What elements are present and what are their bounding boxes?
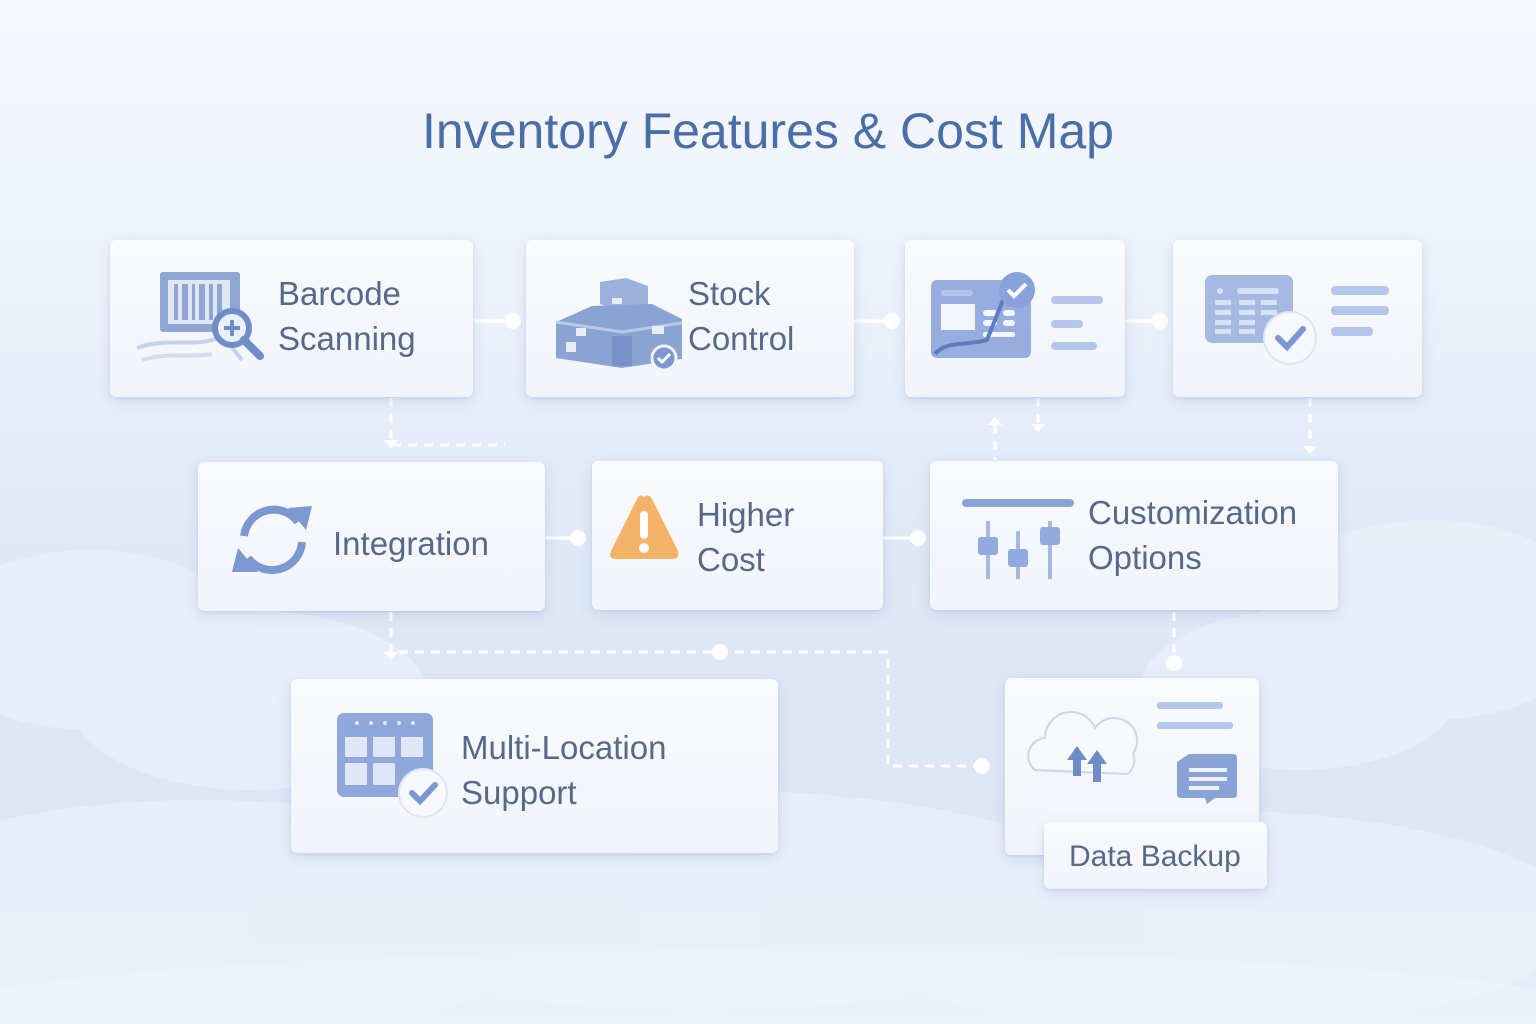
card: Higher Cost: Cost xyxy=(697,541,765,578)
card: Data Backup xyxy=(1005,678,1259,855)
card: report icon xyxy=(905,240,1125,397)
icon: table with check xyxy=(1205,275,1389,365)
label: Data Backup: Data Backup xyxy=(1069,840,1241,873)
icon: sync arrows xyxy=(232,506,312,574)
label: Data Backup xyxy=(1044,822,1267,889)
icon: calendar grid with check xyxy=(337,713,448,818)
icon: sliders xyxy=(962,499,1074,579)
icon: cloud upload and chat xyxy=(1027,702,1237,804)
card: Higher Cost xyxy=(592,461,883,610)
card: Multi-Location Support xyxy=(291,679,778,853)
card: Higher Cost: Higher xyxy=(697,496,794,533)
card: Customization Options: Customization xyxy=(1088,494,1297,531)
card: Integration xyxy=(198,462,545,611)
card: Stock Control: Stock xyxy=(688,275,771,312)
title: Inventory Features & Cost Map xyxy=(422,103,1114,159)
card: Customization Options xyxy=(930,461,1338,610)
card: table check icon xyxy=(1173,240,1422,397)
card: Multi-Location Support: Multi-Location xyxy=(461,729,666,766)
icon: warning triangle xyxy=(610,495,678,559)
card: Barcode Scanning: Barcode xyxy=(278,275,401,312)
card: Stock Control xyxy=(526,240,854,397)
card: Customization Options: Options xyxy=(1088,539,1202,576)
card: Stock Control: Control xyxy=(688,320,794,357)
icon: chart doc with check xyxy=(931,272,1103,358)
card: Barcode Scanning xyxy=(110,240,473,397)
icon: barcode scanner xyxy=(136,272,264,362)
card: Barcode Scanning: Scanning xyxy=(278,320,416,357)
card: Multi-Location Support: Support xyxy=(461,774,577,811)
card: Integration: Integration xyxy=(333,525,489,562)
icon: boxes xyxy=(556,278,682,368)
